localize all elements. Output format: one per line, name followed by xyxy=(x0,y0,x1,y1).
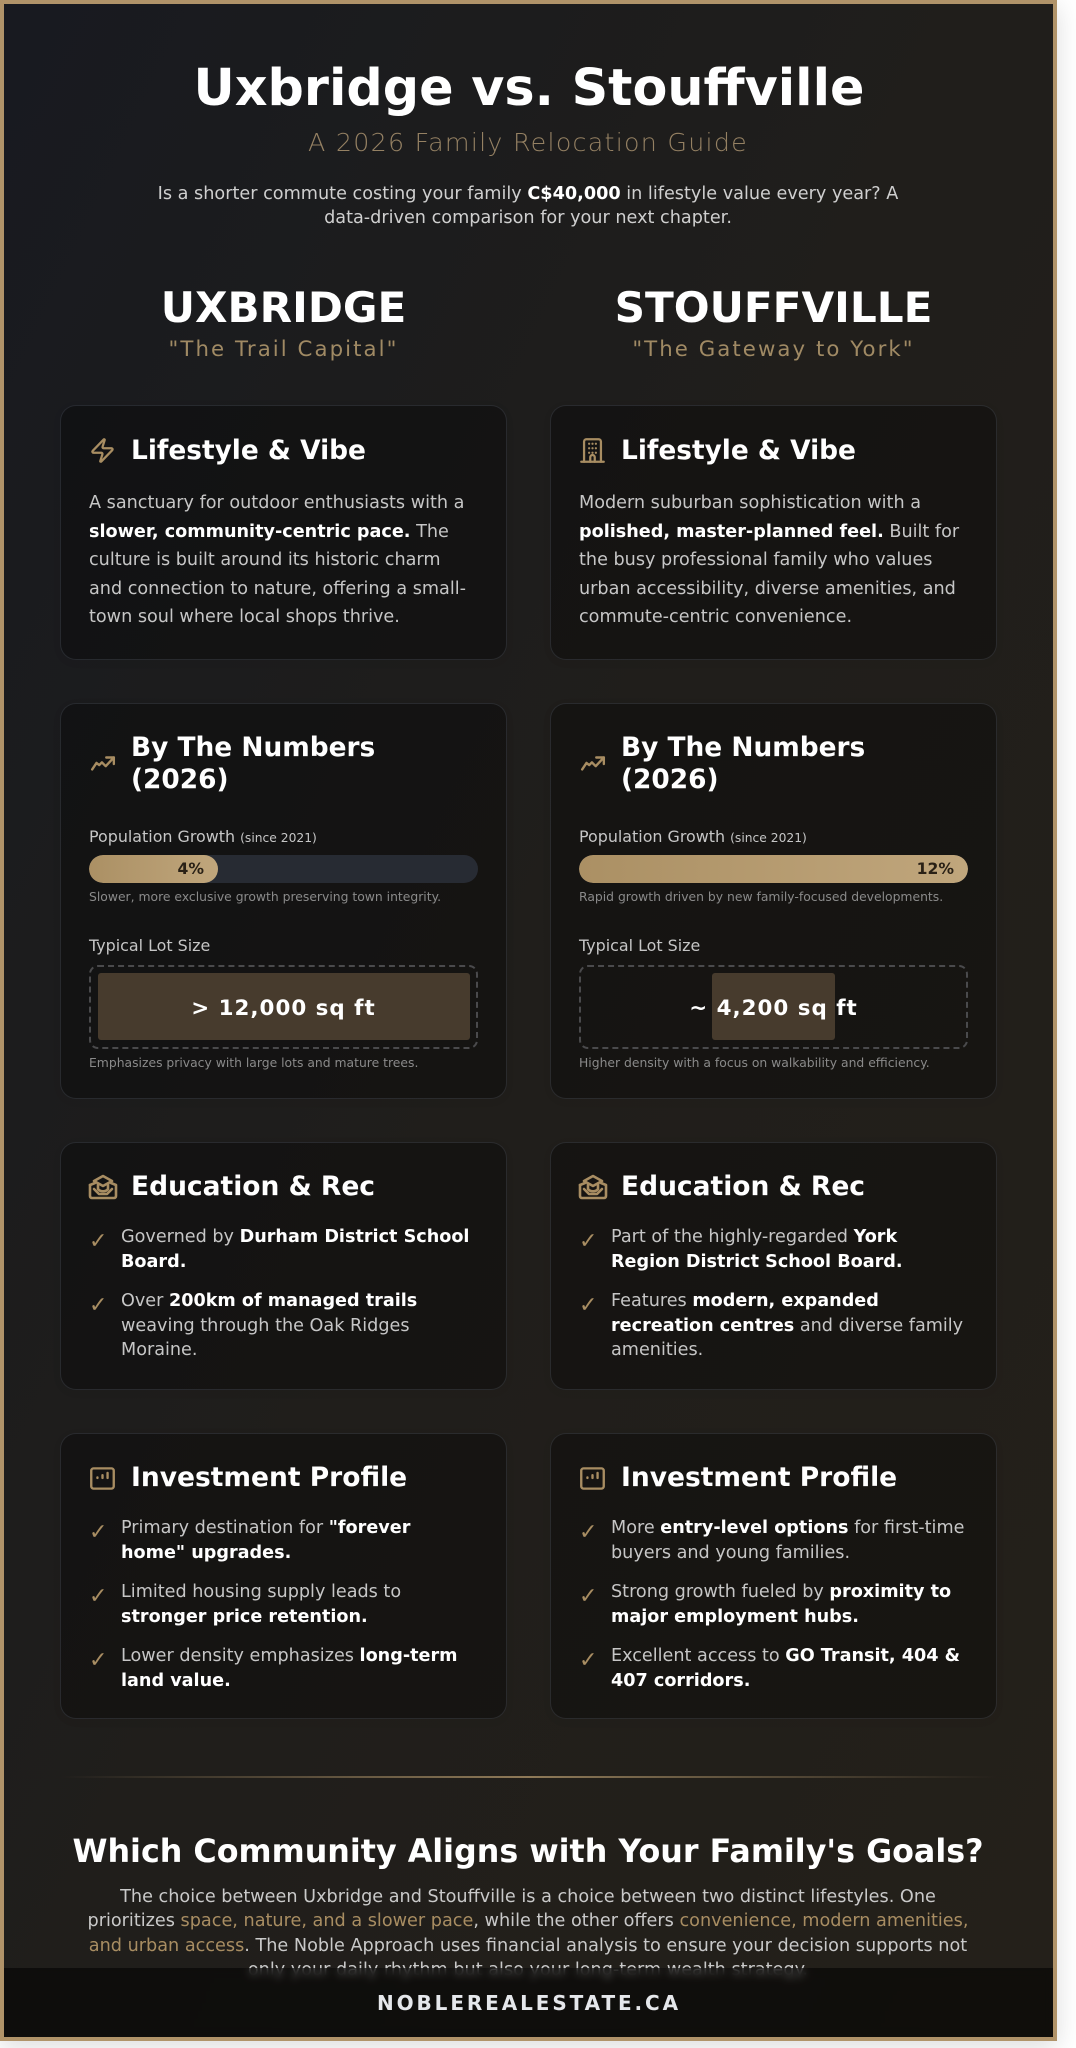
bar fill: 12% xyxy=(917,860,954,878)
bar: population growth 4% xyxy=(89,855,478,883)
heading: (2026) xyxy=(131,764,229,795)
heading: Investment Profile xyxy=(621,1462,897,1493)
list item: home" upgrades. xyxy=(121,1543,291,1563)
list item xyxy=(611,1227,903,1272)
panel: Stouffville education xyxy=(550,1142,997,1390)
check: ✓ xyxy=(579,1648,597,1673)
list item: weaving through the Oak Ridges xyxy=(121,1316,410,1336)
panel: Uxbridge numbers xyxy=(60,703,507,1099)
Stouffville tagline: "The Gateway to York" xyxy=(632,337,915,362)
list item: Limited housing supply leads to xyxy=(121,1582,401,1602)
list item xyxy=(121,1582,401,1627)
bar fill: 4% xyxy=(178,860,204,878)
list item: Governed by Durham District School xyxy=(121,1227,469,1247)
heading: By The Numbers xyxy=(131,732,375,763)
bar note: Slower, more exclusive growth preserving town integrity. xyxy=(89,890,441,904)
heading: Lifestyle & Vibe xyxy=(131,435,366,466)
list item: Features modern, expanded xyxy=(611,1291,879,1311)
panel: Stouffville numbers xyxy=(550,703,997,1099)
closing heading: Which Community Aligns with Your Family's Goals? xyxy=(72,1834,984,1870)
icon: building xyxy=(580,438,605,463)
heading: Investment Profile xyxy=(131,1462,407,1493)
check: ✓ xyxy=(579,1584,597,1609)
list item xyxy=(611,1291,963,1360)
list item: More entry-level options for first-time xyxy=(611,1518,964,1538)
list item: Over 200km of managed trails xyxy=(121,1291,417,1311)
dashed lot outline xyxy=(89,965,478,1049)
Uxbridge tagline: "The Trail Capital" xyxy=(169,337,398,362)
icon: school xyxy=(88,1174,118,1200)
list item xyxy=(121,1227,469,1272)
body text: slower, community-centric pace. The xyxy=(89,522,449,542)
body text: urban accessibility, diverse amenities, and xyxy=(579,579,956,599)
list item: amenities. xyxy=(611,1340,703,1360)
lot size label: Typical Lot Size xyxy=(89,936,210,955)
check: ✓ xyxy=(579,1293,597,1318)
body text: culture is built around its historic charm xyxy=(89,550,440,570)
body text: A sanctuary for outdoor enthusiasts with a xyxy=(89,493,464,513)
body text: commute-centric convenience. xyxy=(579,607,852,627)
panel: Uxbridge education xyxy=(60,1142,507,1390)
heading xyxy=(621,732,865,795)
panel: Stouffville investment xyxy=(550,1433,997,1719)
body text: Modern suburban sophistication with a xyxy=(579,493,921,513)
intro text: data-driven comparison for your next chapter. xyxy=(324,208,732,228)
lot size value: > 12,000 sq ft xyxy=(191,996,376,1020)
list item: Region District School Board. xyxy=(611,1252,903,1272)
body text: the busy professional family who values xyxy=(579,550,932,570)
icon: chart xyxy=(90,1467,115,1490)
closing text: only your daily rhythm but also your long-term wealth strategy. xyxy=(248,1960,808,1980)
list item xyxy=(121,1291,417,1360)
check: ✓ xyxy=(89,1584,107,1609)
heading: (2026) xyxy=(621,764,719,795)
lot note: Higher density with a focus on walkability and efficiency. xyxy=(579,1056,930,1070)
list item xyxy=(611,1646,960,1691)
heading xyxy=(131,732,375,795)
bar fill xyxy=(89,855,218,883)
check: ✓ xyxy=(89,1293,107,1318)
list item: Part of the highly-regarded York xyxy=(611,1227,897,1247)
bar note: Rapid growth driven by new family-focused developments. xyxy=(579,890,943,904)
check: ✓ xyxy=(89,1520,107,1545)
lot size fill xyxy=(98,973,470,1040)
check: ✓ xyxy=(579,1520,597,1545)
dashed lot outline xyxy=(579,965,968,1049)
list item xyxy=(121,1518,410,1563)
icon: lightning bolt xyxy=(91,438,114,463)
icon: trending up xyxy=(580,756,606,771)
footer bar xyxy=(0,1968,1053,2038)
check: ✓ xyxy=(579,1229,597,1254)
list item: major employment hubs. xyxy=(611,1607,859,1627)
subtitle: A 2026 Family Relocation Guide xyxy=(308,128,748,157)
closing text: prioritizes space, nature, and a slower pace, while the other offers convenience, modern amenities, xyxy=(88,1911,968,1931)
panel: Uxbridge lifestyle xyxy=(60,405,507,660)
body text: polished, master-planned feel. Built for xyxy=(579,522,959,542)
check: ✓ xyxy=(89,1229,107,1254)
list item: Excellent access to GO Transit, 404 & xyxy=(611,1646,960,1666)
heading: By The Numbers xyxy=(621,732,865,763)
body text: town soul where local shops thrive. xyxy=(89,607,400,627)
lot size label: Typical Lot Size xyxy=(579,936,700,955)
footer bar: NOBLEREALESTATE.CA xyxy=(377,1991,681,2015)
list item: buyers and young families. xyxy=(611,1543,850,1563)
list item: Lower density emphasizes long-term xyxy=(121,1646,458,1666)
lot note: Emphasizes privacy with large lots and mature trees. xyxy=(89,1056,418,1070)
intro text xyxy=(158,184,898,228)
title: Uxbridge vs. Stouffville xyxy=(194,58,864,116)
heading: Lifestyle & Vibe xyxy=(621,435,856,466)
list item: Board. xyxy=(121,1252,186,1272)
body text xyxy=(89,493,466,627)
list item: Moraine. xyxy=(121,1340,197,1360)
list item xyxy=(611,1518,964,1563)
Uxbridge column heading: UXBRIDGE xyxy=(161,283,406,332)
panel: Stouffville lifestyle xyxy=(550,405,997,660)
icon: school xyxy=(578,1174,608,1200)
population label: Population Growth (since 2021) xyxy=(579,826,807,846)
bar: population growth 12% xyxy=(579,855,968,883)
list item xyxy=(611,1582,951,1627)
list item: stronger price retention. xyxy=(121,1607,368,1627)
icon: trending up xyxy=(90,756,116,771)
intro text: Is a shorter commute costing your family C$40,000 in lifestyle value every year? A xyxy=(158,184,898,204)
panel: Uxbridge investment xyxy=(60,1433,507,1719)
heading: Education & Rec xyxy=(131,1171,375,1202)
Stouffville column heading: STOUFFVILLE xyxy=(615,283,932,332)
check: ✓ xyxy=(89,1648,107,1673)
closing text: The choice between Uxbridge and Stouffville is a choice between two distinct lifestyles. One xyxy=(120,1886,936,1906)
closing text xyxy=(88,1886,968,1980)
list item xyxy=(121,1646,458,1691)
list item: land value. xyxy=(121,1671,231,1691)
closing text: and urban access. The Noble Approach uses financial analysis to ensure your decision supports not xyxy=(89,1936,967,1956)
list item: 407 corridors. xyxy=(611,1671,750,1691)
heading: Education & Rec xyxy=(621,1171,865,1202)
icon: chart xyxy=(580,1467,605,1490)
bar fill xyxy=(579,855,968,883)
list item: Strong growth fueled by proximity to xyxy=(611,1582,951,1602)
body text xyxy=(579,493,960,627)
list item: recreation centres and diverse family xyxy=(611,1316,963,1336)
list item: Primary destination for "forever xyxy=(121,1518,410,1538)
body text: and connection to nature, offering a small- xyxy=(89,579,466,599)
lot size fill xyxy=(712,973,835,1040)
population label: Population Growth (since 2021) xyxy=(89,826,317,846)
lot size value: ~ 4,200 sq ft xyxy=(689,996,858,1020)
